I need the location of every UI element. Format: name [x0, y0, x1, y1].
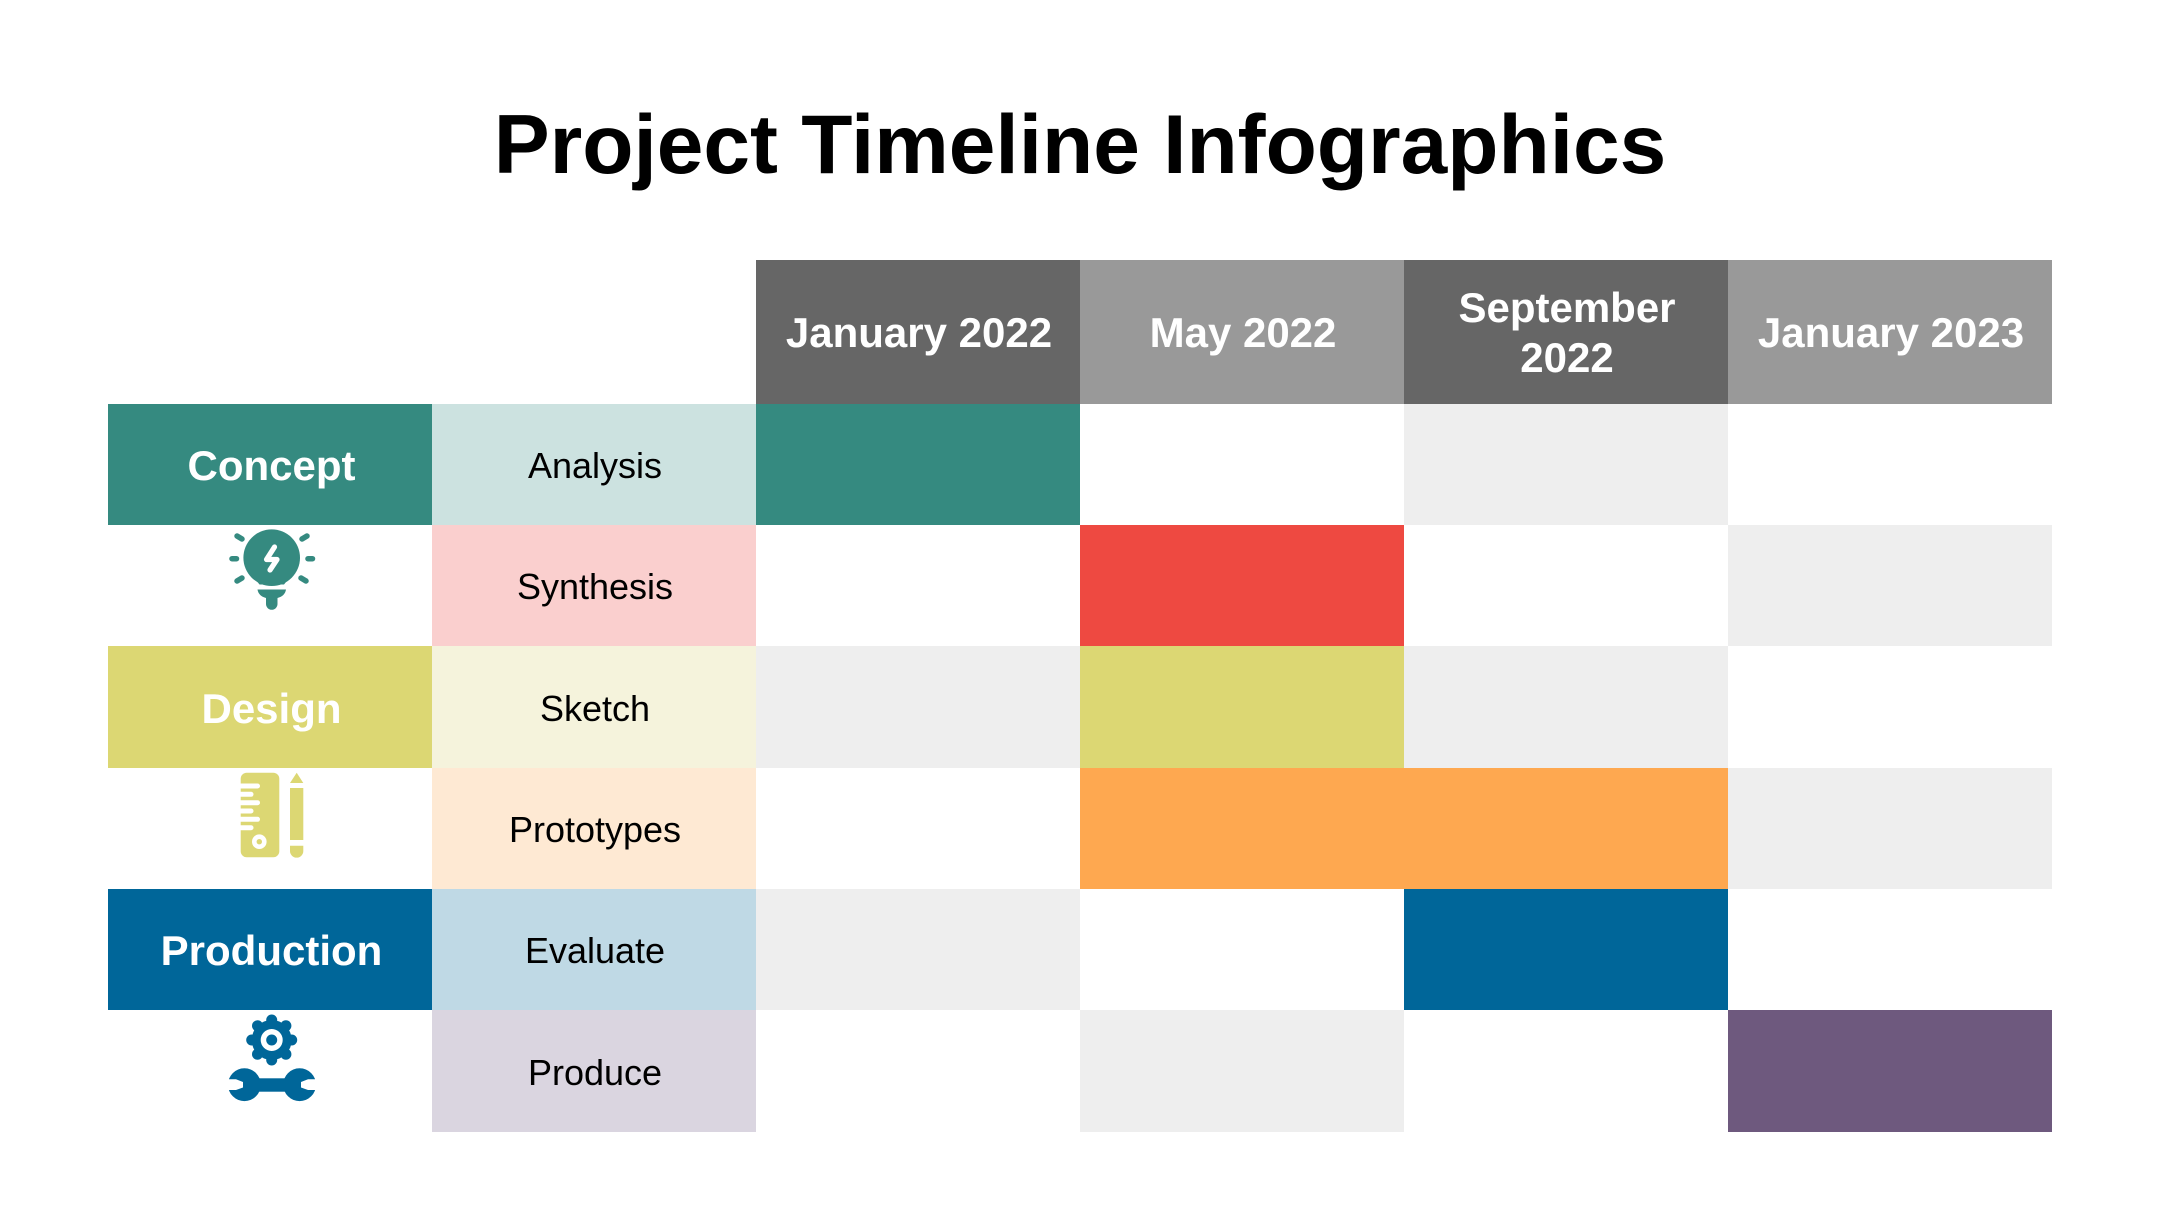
header: January 2023 [1728, 260, 2052, 404]
header: May 2022 [1080, 260, 1404, 404]
header: September 2022: September [1458, 284, 1676, 331]
bar: Sketch, May 2022 [1080, 646, 1404, 768]
task: Evaluate [432, 889, 756, 1010]
task: Produce: Produce [528, 1052, 662, 1092]
title: Project Timeline Infographics [494, 96, 1666, 190]
phase: Production: Production [161, 927, 382, 974]
task: Analysis: Analysis [528, 445, 662, 486]
icon: gear and wrench [224, 1014, 320, 1101]
header: September 2022 [1404, 260, 1728, 404]
task: Prototypes [432, 768, 756, 889]
bar: Evaluate, September 2022 [1404, 889, 1728, 1010]
task: Synthesis: Synthesis [517, 566, 673, 607]
task: Synthesis [432, 525, 756, 646]
header: January 2022: January 2022 [786, 309, 1052, 356]
task: Sketch [432, 646, 756, 768]
task: Produce [432, 1010, 756, 1132]
header: May 2022: May 2022 [1150, 309, 1336, 356]
header: January 2022 [756, 260, 1080, 404]
icon: light bulb [232, 529, 312, 610]
phase: Concept [108, 404, 432, 525]
bar: Produce, January 2023 [1728, 1010, 2052, 1132]
bar: Analysis, January 2022 [756, 404, 1080, 525]
header: September 2022: 2022 [1520, 334, 1614, 381]
bar: Prototypes, May to September 2022 [1080, 768, 1728, 889]
phase: Concept: Concept [188, 442, 356, 489]
task: Evaluate: Evaluate [525, 930, 665, 971]
phase: Design [108, 646, 432, 768]
task: Prototypes: Prototypes [509, 809, 681, 850]
header: January 2023: January 2023 [1758, 309, 2024, 356]
phase: Design: Design [201, 684, 342, 732]
icon: ruler and pencil [238, 773, 303, 858]
phase: Production [108, 889, 432, 1010]
task: Analysis [432, 404, 756, 525]
grey background cells [756, 404, 2052, 1132]
bar: Synthesis, May 2022 [1080, 525, 1404, 646]
task: Sketch: Sketch [540, 688, 650, 728]
